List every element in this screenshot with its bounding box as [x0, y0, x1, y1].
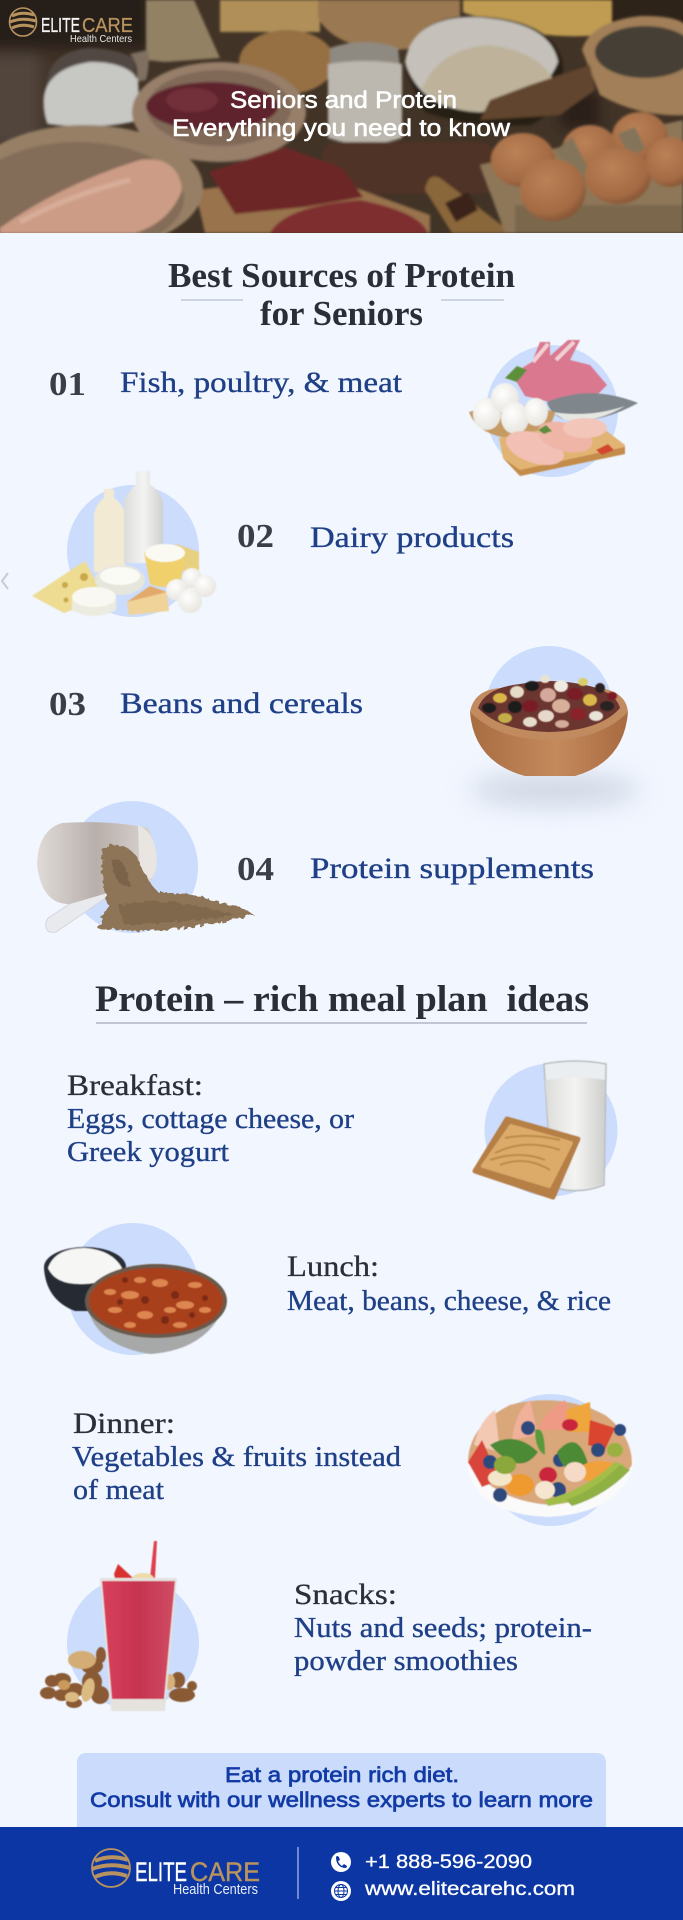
phone number: +1 888-596-2090: [365, 1852, 532, 1873]
heading: best sources: Best Sources of Protein: [168, 256, 515, 295]
source 02 label: Dairy products: [310, 521, 514, 554]
source 01 label: [49, 366, 403, 403]
hero title: Everything you need to know: [172, 115, 511, 142]
breakfast text: [67, 1069, 354, 1168]
source 03 label: 03: [49, 686, 86, 723]
breakfast text: Eggs, cottage cheese, or: [67, 1103, 354, 1135]
call to action panel: [77, 1753, 606, 1827]
call to action panel: Eat a protein rich diet.: [225, 1764, 459, 1787]
source 03 label: Beans and cereals: [120, 687, 363, 720]
footer band: [0, 1827, 683, 1920]
footer logo: ELITE: [135, 1857, 187, 1887]
hero logo: Health Centers: [70, 33, 132, 45]
icon: protein powder scoop: [37, 801, 253, 933]
icon: fish, poultry and meat: [469, 340, 638, 477]
lunch text: [287, 1250, 611, 1317]
snacks text: [294, 1578, 592, 1677]
heading: best sources: [168, 256, 515, 333]
source 02 label: 02: [237, 518, 274, 555]
breakfast text: Breakfast:: [67, 1069, 203, 1102]
heading: best sources: for Seniors: [260, 294, 423, 333]
hero title: [172, 87, 511, 142]
call to action panel: Consult with our wellness experts to learn more: [90, 1789, 593, 1812]
hero title: Seniors and Protein: [230, 87, 457, 114]
hero logo: CARE: [82, 15, 133, 37]
dinner text: Dinner:: [73, 1407, 175, 1440]
source 04 label: 04: [237, 851, 274, 888]
snacks text: powder smoothies: [294, 1645, 518, 1677]
icon: fruit salad bowl: [467, 1394, 635, 1526]
icon: rice and chili bowls: [44, 1223, 227, 1355]
icon: globe: [331, 1881, 351, 1901]
hero logo: [10, 8, 133, 45]
footer logo: Health Centers: [173, 1882, 258, 1898]
footer logo: [92, 1849, 260, 1898]
source 04 label: [237, 851, 594, 888]
lunch text: Lunch:: [287, 1250, 379, 1283]
source 01 label: Fish, poultry, & meat: [120, 366, 403, 399]
icon: phone: [331, 1852, 351, 1872]
source 01 label: 01: [49, 366, 86, 403]
snacks text: Snacks:: [294, 1578, 397, 1611]
icon: dairy products: [32, 471, 216, 617]
source 02 label: [237, 518, 514, 555]
hero logo: ELITE: [41, 15, 80, 37]
breakfast text: Greek yogurt: [67, 1136, 229, 1168]
dinner text: Vegetables & fruits instead: [72, 1441, 402, 1473]
hero photo: protein foods on a table: [0, 0, 683, 254]
heading: meal plan ideas: Protein – rich meal plan ideas: [95, 979, 589, 1020]
stray arrow mark at left edge: [2, 573, 8, 589]
icon: milk and peanut butter toast: [475, 1061, 618, 1197]
source 03 label: [49, 686, 363, 723]
icon: bowl of beans: [470, 646, 640, 806]
source 04 label: Protein supplements: [310, 852, 594, 885]
logo mark: [10, 8, 36, 36]
website: www.elitecarehc.com: [364, 1879, 575, 1900]
dinner text: [72, 1407, 402, 1506]
dinner text: of meat: [73, 1474, 164, 1506]
snacks text: Nuts and seeds; protein-: [294, 1612, 592, 1644]
footer logo: CARE: [190, 1857, 260, 1887]
icon: smoothie and nuts: [40, 1541, 199, 1711]
lunch text: Meat, beans, cheese, & rice: [287, 1285, 611, 1317]
